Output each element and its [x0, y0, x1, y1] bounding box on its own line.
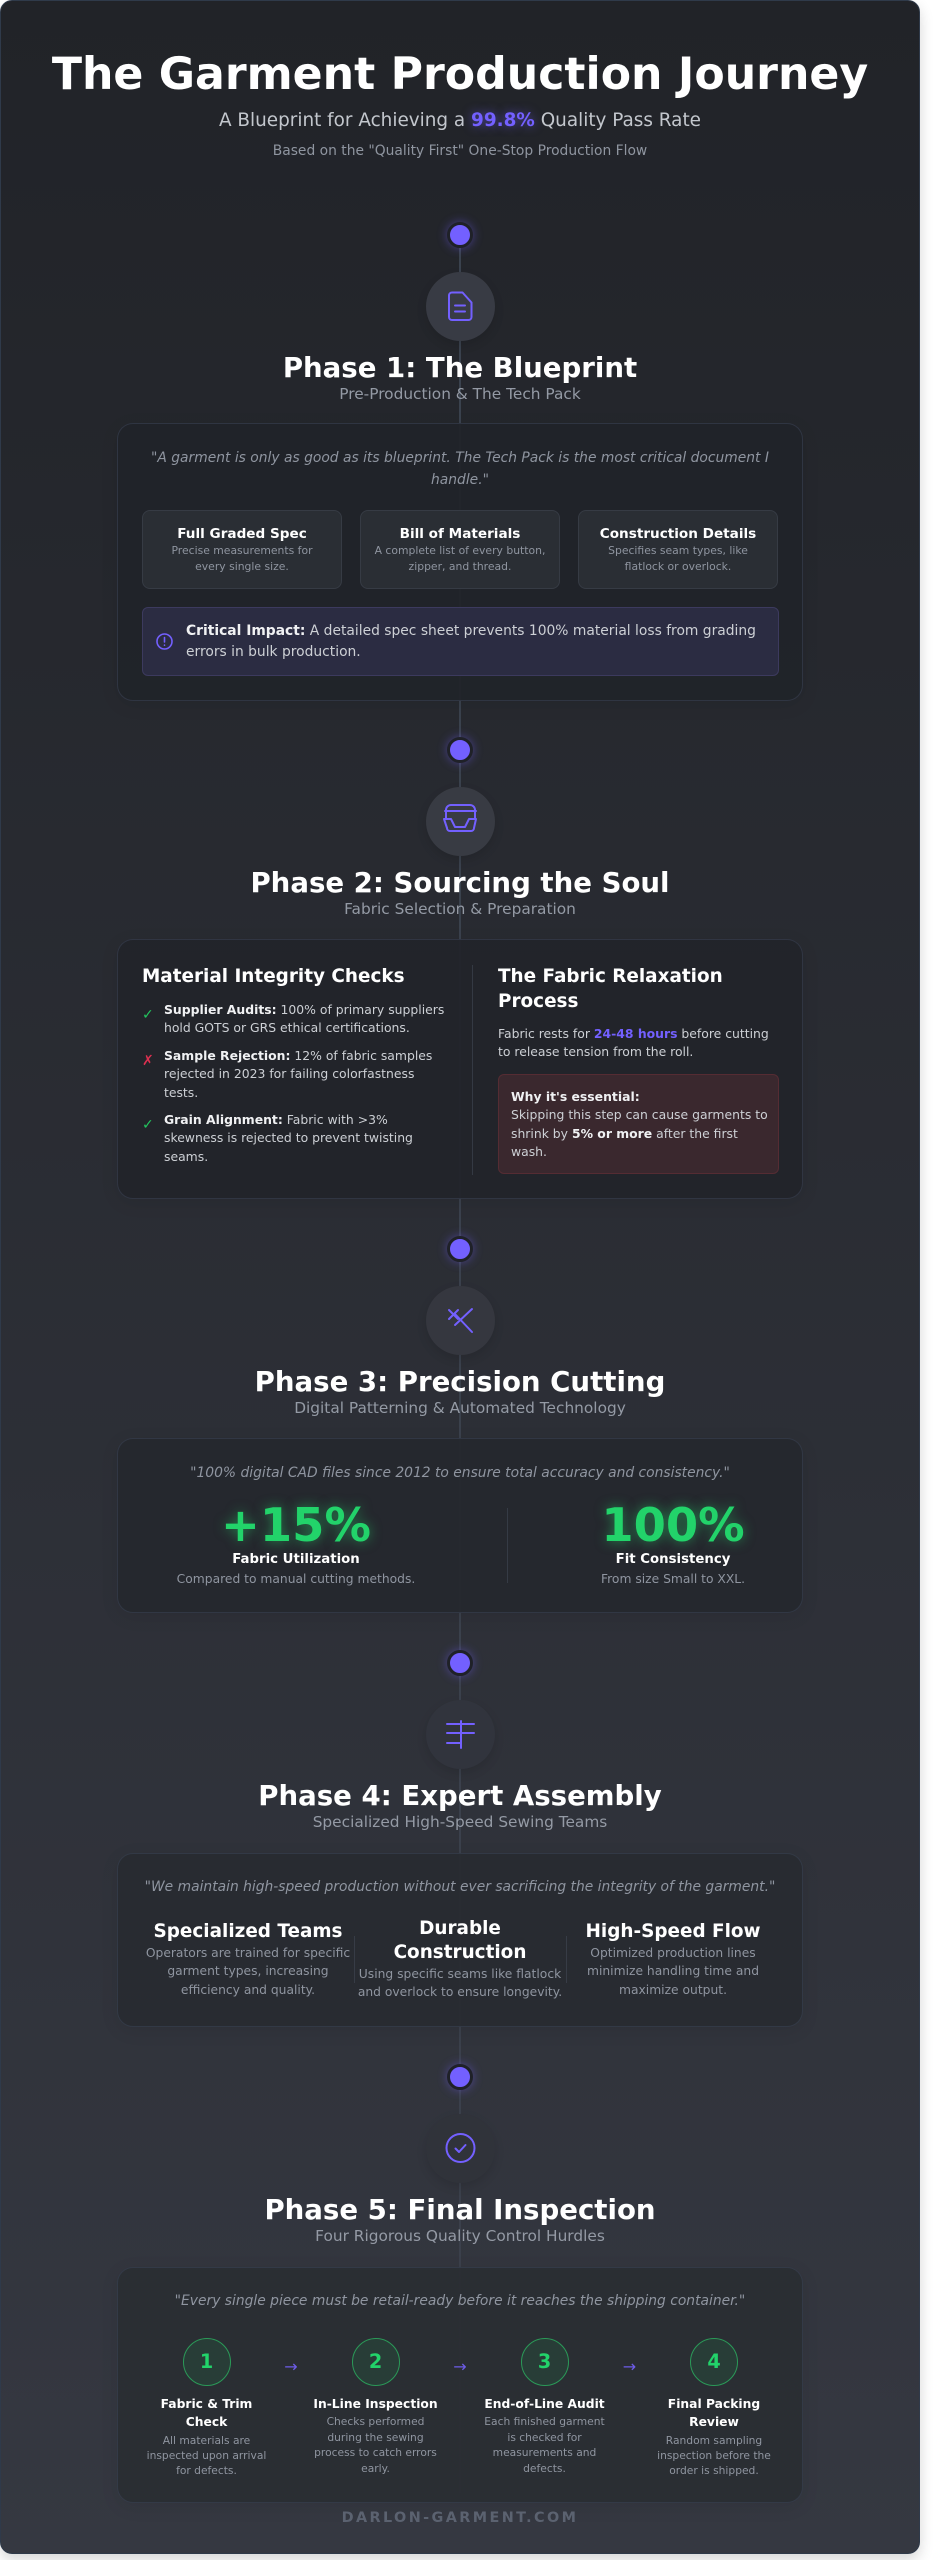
quote: "We maintain high-speed production without ever sacrificing the integrity of the garment." — [145, 1879, 775, 1895]
step 1 — [147, 2338, 266, 2477]
column: high-speed flow: minimize handling time and — [587, 1964, 759, 1978]
phase title: Phase 3: Precision Cutting — [255, 1365, 665, 1398]
icon: alert — [156, 633, 173, 650]
step 2: early. — [361, 2462, 390, 2475]
icon: document — [426, 272, 495, 341]
icon: sewing — [426, 1700, 495, 1769]
step 2: process to catch errors — [314, 2446, 437, 2459]
step number — [352, 2338, 400, 2386]
phase 4 header — [258, 1644, 662, 1831]
step 2: during the sewing — [327, 2431, 424, 2444]
relaxation text: Fabric rests for 24-48 hours before cutting — [498, 1026, 769, 1041]
phase title: Phase 4: Expert Assembly — [258, 1779, 662, 1812]
step 4: Review — [689, 2415, 739, 2429]
step 1: for defects. — [176, 2464, 237, 2477]
step 3: Each finished garment — [484, 2415, 605, 2428]
quote — [151, 450, 769, 488]
heading: fabric relaxation: The Fabric Relaxation — [498, 966, 723, 987]
stat value: +15% — [221, 1498, 371, 1552]
step number — [182, 2338, 230, 2386]
callout text: Critical Impact: A detailed spec sheet prevents 100% material loss from grading — [186, 622, 756, 638]
quote: "Every single piece must be retail-ready before it reaches the shipping container." — [175, 2293, 745, 2309]
stat: fit consistency — [601, 1498, 749, 1586]
list item: grain alignment: skewness is rejected to prevent twisting — [164, 1130, 413, 1145]
step 4: order is shipped. — [669, 2464, 759, 2477]
panel: blueprint — [117, 423, 803, 701]
panel: assembly — [117, 1853, 803, 2027]
phase subtitle: Four Rigorous Quality Control Hurdles — [315, 2227, 605, 2245]
list item: supplier audits: hold GOTS or GRS ethical certifications. — [164, 1020, 410, 1035]
icon: check circle — [426, 2114, 495, 2183]
phase title: Phase 2: Sourcing the Soul — [250, 866, 670, 899]
card: construction details — [578, 510, 778, 589]
step 4: inspection before the — [657, 2449, 771, 2462]
list item: supplier audits: Supplier Audits: 100% of primary suppliers — [164, 1002, 444, 1017]
check mark: ✓ — [142, 1007, 154, 1023]
column: durable construction: Durable — [419, 1918, 501, 1939]
column: durable construction: Using specific seams like flatlock — [359, 1967, 561, 1981]
column: high-speed flow: Optimized production lines — [590, 1946, 756, 1960]
callout: why essential: Why it's essential: — [511, 1089, 640, 1104]
step 2: Checks performed — [327, 2415, 424, 2428]
step 4: Final Packing — [668, 2397, 760, 2411]
step 3 — [484, 2338, 605, 2475]
timeline dot — [447, 1650, 473, 1676]
card: full graded spec: Precise measurements for — [171, 544, 313, 557]
stat label: Fit Consistency — [616, 1552, 730, 1567]
list item: sample rejection: Sample Rejection: 12% of fabric samples — [164, 1048, 432, 1063]
step 1: Check — [186, 2415, 227, 2429]
step 1: Fabric & Trim — [161, 2397, 252, 2411]
icon: scissors — [426, 1286, 495, 1355]
stat value: 100% — [601, 1498, 745, 1552]
column: durable construction — [358, 1918, 562, 1999]
callout: why essential: shrink by 5% or more after the first — [511, 1126, 738, 1141]
timeline dot — [447, 737, 473, 763]
callout: critical impact — [142, 607, 779, 676]
step number — [690, 2338, 738, 2386]
phase 2 header — [250, 732, 670, 918]
arrow: → — [453, 2357, 467, 2376]
footer: DARLON-GARMENT.COM — [342, 2510, 578, 2526]
card: construction details: flatlock or overlock. — [625, 560, 731, 573]
card: full graded spec: Full Graded Spec — [177, 526, 307, 542]
panel: sourcing — [117, 939, 803, 1199]
column: specialized teams: garment types, increasing — [167, 1964, 329, 1978]
title: The Garment Production Journey — [52, 49, 868, 100]
heading: fabric relaxation — [498, 966, 723, 1012]
card: full graded spec — [142, 510, 342, 589]
phase subtitle: Fabric Selection & Preparation — [344, 900, 576, 918]
step 3: End-of-Line Audit — [484, 2397, 605, 2411]
step 2: In-Line Inspection — [313, 2397, 438, 2411]
callout text: errors in bulk production. — [186, 644, 361, 660]
phase 1 header — [283, 216, 637, 403]
timeline dot — [447, 222, 473, 248]
card: construction details: Construction Details — [600, 526, 756, 542]
step 4 — [657, 2338, 771, 2477]
column: specialized teams — [146, 1921, 350, 1997]
quote: "A garment is only as good as its blueprint. The Tech Pack is the most critical document I — [151, 450, 769, 466]
card: construction details: Specifies seam types, like — [608, 544, 748, 557]
step number — [520, 2338, 568, 2386]
column: high-speed flow: High-Speed Flow — [586, 1921, 760, 1942]
callout: why essential — [498, 1074, 779, 1174]
list item: grain alignment: seams. — [164, 1149, 208, 1164]
list item: grain alignment: Grain Alignment: Fabric with >3% — [164, 1112, 388, 1127]
cross mark: ✗ — [142, 1053, 154, 1069]
card: bill of materials — [360, 510, 560, 589]
phase title: Phase 5: Final Inspection — [264, 2193, 656, 2226]
arrow: → — [623, 2357, 636, 2376]
relaxation text — [498, 1026, 769, 1059]
source note: Based on the "Quality First" One-Stop Production Flow — [273, 143, 647, 159]
check mark: ✓ — [142, 1117, 154, 1133]
card: bill of materials: A complete list of every button, — [375, 544, 545, 557]
column: specialized teams: Operators are trained for specific — [146, 1946, 350, 1960]
timeline dot — [447, 1236, 473, 1262]
panel: cutting — [117, 1438, 803, 1613]
stat note: From size Small to XXL. — [601, 1572, 745, 1586]
timeline line — [459, 235, 461, 2493]
card: bill of materials: Bill of Materials — [400, 526, 520, 542]
step 1: inspected upon arrival — [147, 2449, 266, 2462]
subtitle: A Blueprint for Achieving a 99.8% Quality Pass Rate — [219, 110, 701, 131]
column: durable construction: Construction — [394, 1942, 526, 1963]
callout text — [186, 622, 756, 660]
callout: why essential: Skipping this step can cause garments to — [511, 1107, 768, 1122]
quote: handle." — [431, 472, 489, 488]
step 1: All materials are — [163, 2434, 250, 2447]
step number: 3 — [538, 2350, 551, 2373]
heading: material integrity: Material Integrity Checks — [142, 966, 405, 987]
step 4: Random sampling — [666, 2434, 762, 2447]
stat note: Compared to manual cutting methods. — [177, 1572, 415, 1586]
column: high-speed flow — [586, 1921, 760, 1997]
list item: sample rejection: rejected in 2023 for failing colorfastness — [164, 1066, 414, 1081]
phase subtitle: Digital Patterning & Automated Technology — [294, 1399, 626, 1417]
step number: 1 — [200, 2350, 213, 2373]
phase 5 header — [264, 2058, 656, 2245]
phase subtitle: Specialized High-Speed Sewing Teams — [313, 1813, 607, 1831]
column: specialized teams: Specialized Teams — [154, 1921, 342, 1942]
timeline dot — [447, 2064, 473, 2090]
card: bill of materials: zipper, and thread. — [409, 560, 511, 573]
list item: sample rejection — [164, 1048, 432, 1100]
stat: fabric utilization — [177, 1498, 415, 1586]
step number: 4 — [707, 2350, 721, 2373]
phase title: Phase 1: The Blueprint — [283, 351, 637, 384]
stat label: Fabric Utilization — [232, 1552, 360, 1567]
relaxation text: to release tension from the roll. — [498, 1044, 693, 1059]
step 3: measurements and — [493, 2446, 596, 2459]
phase 3 header — [255, 1230, 665, 1417]
list item: sample rejection: tests. — [164, 1085, 198, 1100]
column: high-speed flow: maximize output. — [619, 1983, 727, 1997]
column: specialized teams: efficiency and quality. — [181, 1983, 315, 1997]
panel: inspection — [117, 2267, 803, 2503]
icon: fabric — [426, 787, 495, 856]
list item: supplier audits — [164, 1002, 444, 1035]
arrow: → — [284, 2357, 298, 2376]
heading: fabric relaxation: Process — [498, 991, 578, 1012]
list item: grain alignment — [164, 1112, 413, 1164]
phase subtitle: Pre-Production & The Tech Pack — [339, 385, 581, 403]
card: full graded spec: every single size. — [195, 560, 289, 573]
step 3: defects. — [523, 2462, 566, 2475]
step 3: is checked for — [507, 2431, 582, 2444]
callout: why essential: wash. — [511, 1144, 547, 1159]
step 2 — [313, 2338, 438, 2475]
column: durable construction: and overlock to ensure longevity. — [358, 1985, 562, 1999]
quote: "100% digital CAD files since 2012 to ensure total accuracy and consistency." — [190, 1465, 730, 1481]
step number: 2 — [369, 2350, 382, 2373]
